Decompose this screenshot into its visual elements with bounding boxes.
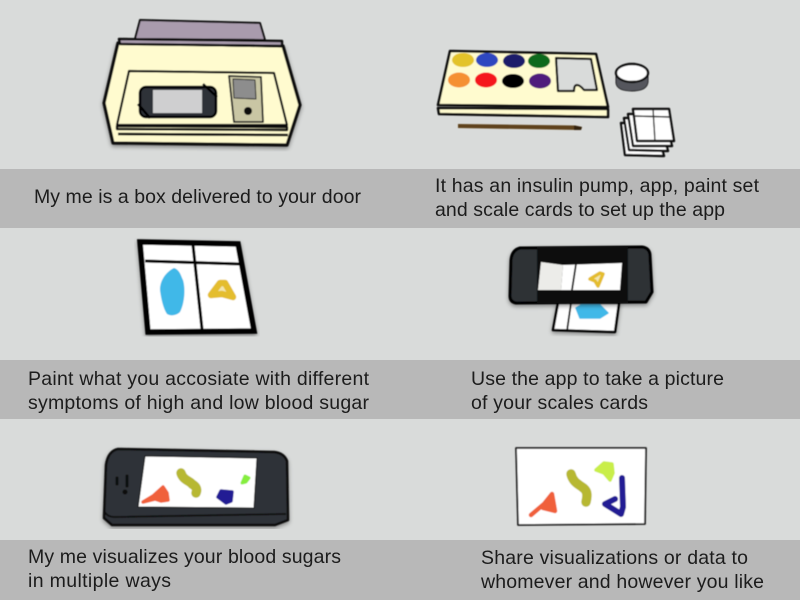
- navy shape: [218, 491, 232, 503]
- yellow paint: [590, 273, 603, 286]
- caption: paint symptoms: symptoms of high and low blood sugar: [28, 392, 370, 414]
- band: row 2 caption: [0, 360, 800, 419]
- caption: take a picture: Use the app to take a picture: [471, 368, 724, 390]
- illustration: painted scale card: [140, 242, 254, 332]
- caption: what it has: and scale cards to set up the app: [435, 199, 725, 221]
- band: row 1 caption: [0, 169, 800, 228]
- caption: take a picture: [471, 368, 724, 414]
- navy shape: [605, 478, 623, 514]
- caption: visualizes blood sugars: My me visualizes your blood sugars: [28, 546, 341, 568]
- caption: what it has: [435, 175, 760, 221]
- blue paint: [160, 268, 184, 315]
- olive shape: [571, 474, 587, 502]
- caption: share visualizations: whomever and however you like: [480, 571, 764, 593]
- green shape: [242, 476, 249, 483]
- band: row 3 caption: [0, 540, 800, 600]
- olive shape: [181, 473, 197, 493]
- caption: paint symptoms: Paint what you accosiate with different: [28, 368, 370, 390]
- illustration: phone scanning card: [510, 247, 652, 332]
- illustration: phone with visualization: [104, 449, 288, 525]
- caption: visualizes blood sugars: in multiple ways: [28, 570, 171, 592]
- blue paint: [576, 305, 608, 318]
- orange letter shape: [531, 494, 555, 515]
- caption: share visualizations: [480, 547, 764, 593]
- yellow paint: [211, 283, 233, 297]
- illustration: delivery box: [104, 20, 300, 145]
- caption: take a picture: of your scales cards: [471, 392, 648, 414]
- illustration: paint set, pump, scale cards: [438, 51, 674, 156]
- caption: share visualizations: Share visualizations or data to: [481, 547, 748, 569]
- caption: box delivered: My me is a box delivered to your door: [34, 186, 362, 208]
- lime shape: [596, 463, 613, 480]
- caption: what it has: It has an insulin pump, app, paint set: [435, 175, 760, 197]
- orange shape: [143, 487, 168, 502]
- caption: paint symptoms: [28, 368, 370, 414]
- caption: visualizes blood sugars: [28, 546, 341, 592]
- illustration: shared visualization card: [516, 448, 646, 525]
